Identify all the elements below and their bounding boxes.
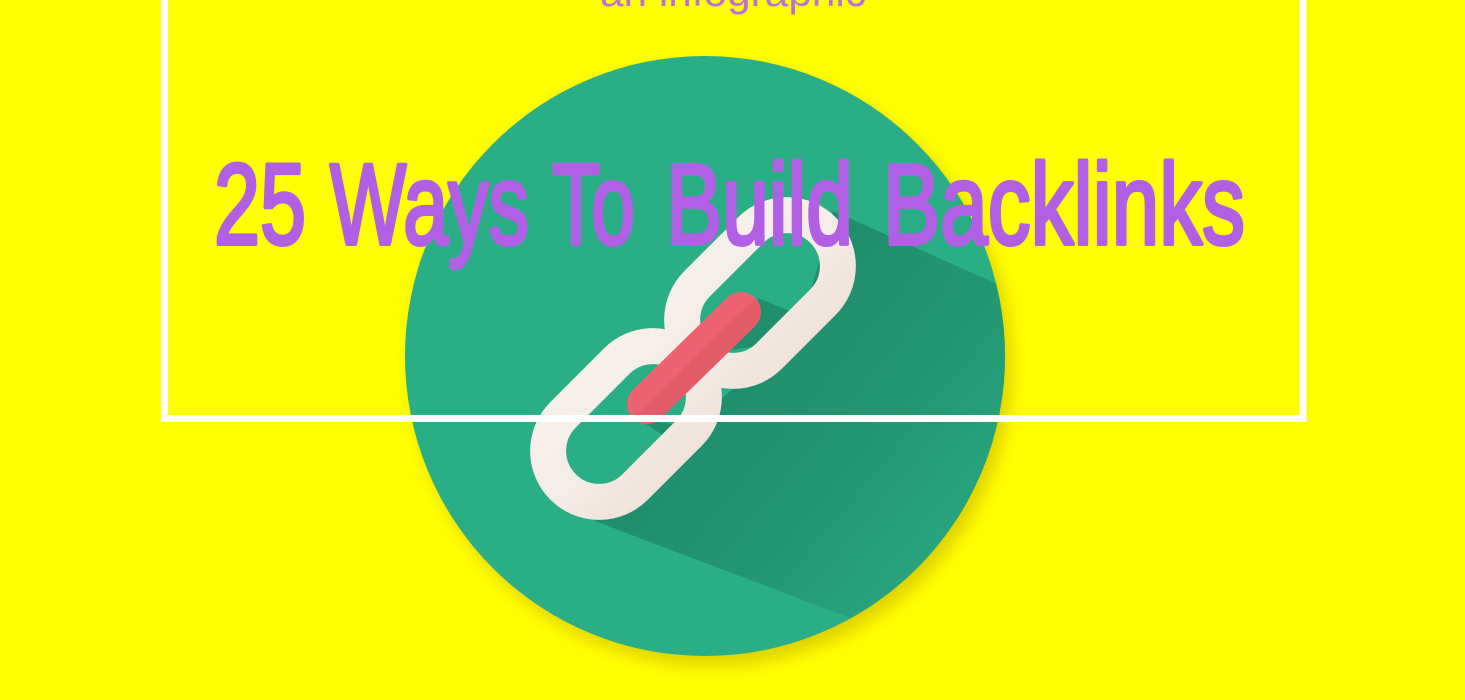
lower chain link [527, 325, 725, 523]
white frame [164, 0, 1303, 418]
upper chain link [661, 194, 859, 392]
icon: chain link badge [405, 56, 1060, 665]
infographic cover [161, 0, 1306, 674]
title [214, 141, 1245, 269]
title: Build [666, 141, 853, 269]
red connector bar [633, 298, 761, 424]
title: 25 [214, 141, 306, 269]
badge disc [405, 56, 1005, 656]
badge soft shadow [413, 67, 1011, 665]
title: Ways [330, 141, 529, 269]
long shadow of chain [595, 211, 1005, 618]
title: Backlinks [883, 141, 1245, 269]
title: To [552, 141, 635, 269]
